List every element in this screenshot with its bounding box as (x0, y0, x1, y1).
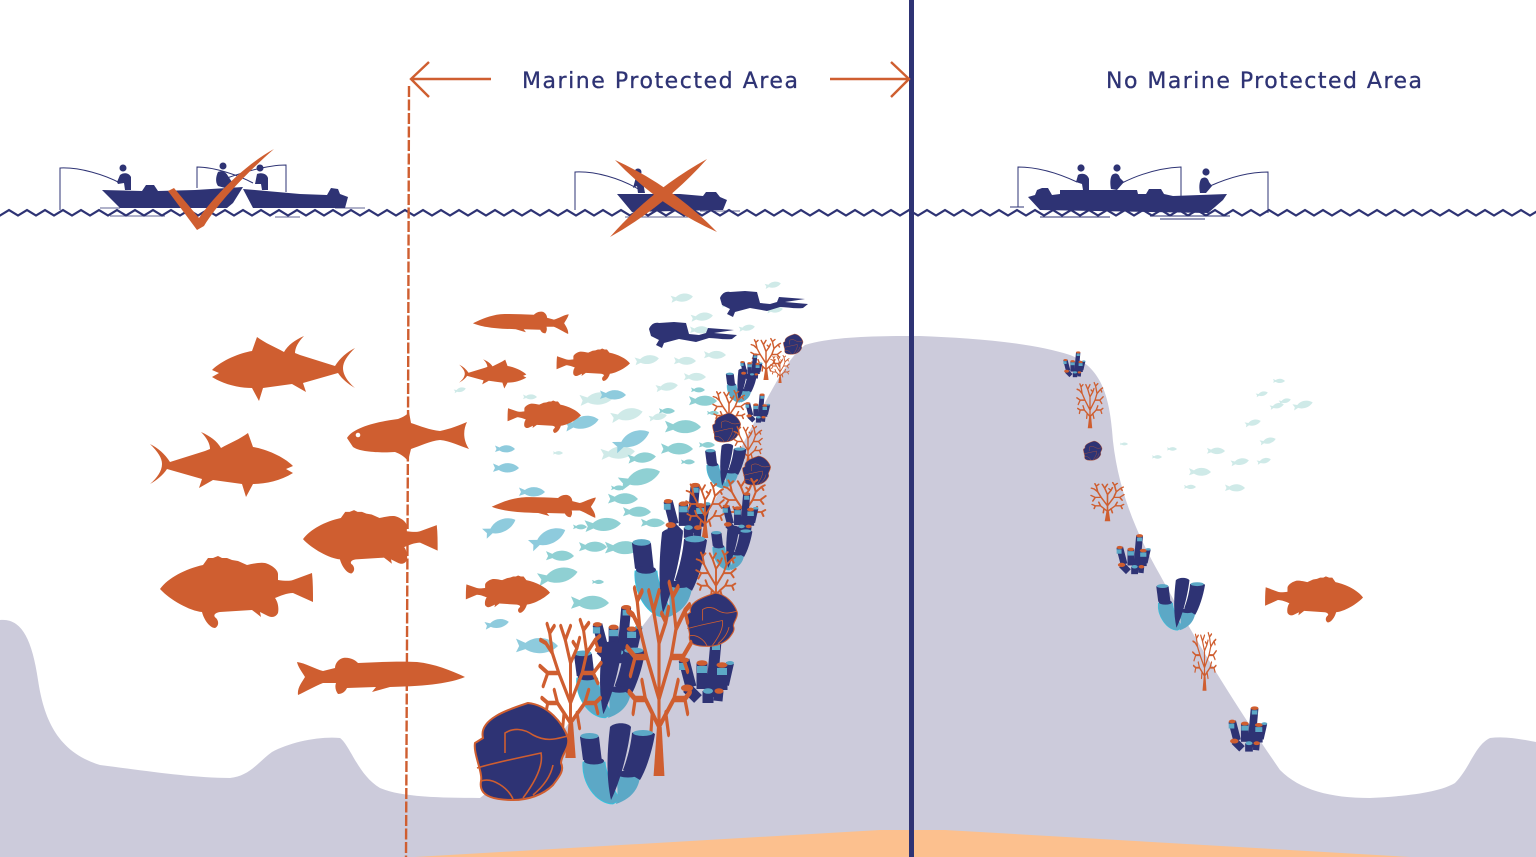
coral reef: unprotected slope (1063, 351, 1267, 752)
large fish: fished zone (150, 336, 469, 695)
central divider line (909, 0, 914, 857)
fish: inside protected area (459, 312, 630, 613)
heading: Marine Protected Area: Marine Protected Area (522, 69, 798, 94)
boats with permitted fishing (60, 162, 365, 217)
fish school: protected area (454, 280, 783, 653)
X mark (610, 159, 717, 237)
dashed boundary line (406, 86, 409, 857)
sand layer (415, 830, 1410, 857)
heading: No Marine Protected Area: No Marine Protected Area (1106, 69, 1422, 94)
water surface (0, 207, 1536, 217)
boundary arrow: right (830, 62, 909, 97)
coral reef: protected slope (475, 334, 803, 804)
fish school: unprotected area (1120, 379, 1314, 491)
boat with prohibited fishing (575, 168, 740, 217)
fish: unprotected area (1265, 576, 1363, 622)
scuba divers (649, 291, 808, 348)
boundary arrow: left (411, 62, 491, 97)
check mark (168, 149, 274, 230)
boats in unprotected area (1010, 164, 1268, 219)
seabed terrain (0, 336, 1536, 857)
